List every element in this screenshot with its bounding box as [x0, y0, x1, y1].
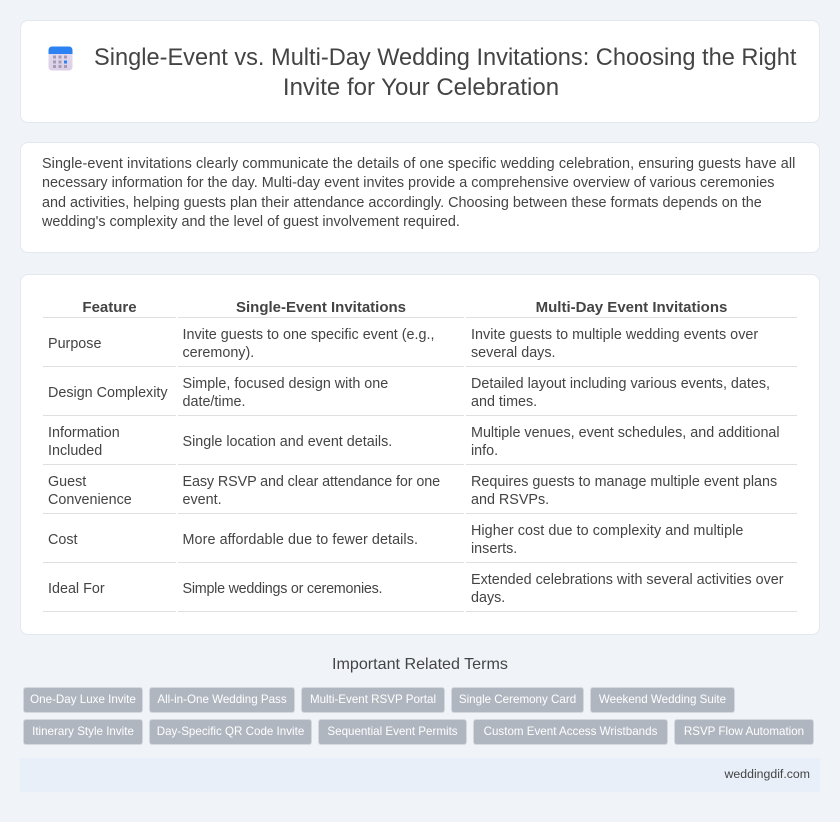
row: purpose: Invite guests to one specific event (e.g.,	[182, 327, 434, 343]
title: Invite for Your Celebration	[283, 74, 559, 101]
row: purpose: ceremony).	[182, 345, 254, 361]
row: design complexity: and times.	[471, 394, 537, 410]
tag: All-in-One Wedding Pass	[157, 693, 287, 706]
row: information included	[48, 425, 780, 459]
tag: Weekend Wedding Suite	[599, 693, 726, 706]
row: cost: More affordable due to fewer details.	[182, 532, 418, 548]
row: guest convenience: event.	[182, 492, 222, 508]
intro paragraph: necessary information for the day. Multi-day event invites provide a comprehensive overview of various ceremonies	[42, 175, 774, 191]
row: ideal for: Ideal For	[48, 581, 105, 597]
panel: comparison table card	[20, 274, 820, 635]
row: purpose	[48, 327, 758, 361]
column heading: multi-day: Multi-Day Event Invitations	[536, 299, 727, 316]
row: design complexity: Detailed layout including various events, dates,	[471, 376, 770, 392]
row: guest convenience: and RSVPs.	[471, 492, 549, 508]
row: cost: Cost	[48, 532, 78, 548]
panel: header card	[20, 20, 820, 123]
tag	[23, 687, 143, 713]
row: cost: inserts.	[471, 541, 517, 557]
tag: Itinerary Style Invite	[32, 725, 134, 738]
icon: calendar	[48, 46, 72, 70]
row: design complexity	[48, 376, 770, 410]
row: purpose: several days.	[471, 345, 556, 361]
tag list: related terms	[23, 687, 814, 745]
tag: RSVP Flow Automation	[684, 725, 804, 738]
row: design complexity: date/time.	[182, 394, 246, 410]
row: guest convenience: Easy RSVP and clear attendance for one	[182, 474, 440, 490]
intro paragraph: wedding's complexity and the level of guest involvement required.	[42, 214, 460, 230]
panel: intro text card	[20, 142, 820, 253]
column heading: feature: Feature	[82, 299, 137, 316]
row: guest convenience: Guest	[48, 474, 86, 490]
row: design complexity: Design Complexity	[48, 385, 168, 401]
tag	[149, 719, 312, 745]
tag: Sequential Event Permits	[327, 725, 458, 738]
tag: Custom Event Access Wristbands	[484, 725, 657, 738]
tag	[301, 687, 445, 713]
tag	[318, 719, 467, 745]
tag	[149, 687, 295, 713]
tag	[590, 687, 735, 713]
row: design complexity: Simple, focused design with one	[182, 376, 388, 392]
tag	[674, 719, 814, 745]
row: cost	[48, 523, 743, 557]
column heading: single-event: Single-Event Invitations	[236, 299, 406, 316]
row: information included: info.	[471, 443, 498, 459]
row: ideal for	[48, 572, 784, 606]
tag: Multi-Event RSVP Portal	[310, 693, 436, 706]
heading: important related terms: Important Related Terms	[332, 655, 508, 673]
row: information included: Single location and event details.	[182, 434, 392, 450]
row: information included: Multiple venues, event schedules, and additional	[471, 425, 780, 441]
row: ideal for: Simple weddings or ceremonies.	[182, 581, 382, 597]
intro paragraph	[42, 156, 795, 230]
row: information included: Information	[48, 425, 120, 441]
intro paragraph: Single-event invitations clearly communicate the details of one specific wedding celebration, ensuring guests have all	[42, 156, 795, 172]
row: ideal for: Extended celebrations with several activities over	[471, 572, 784, 588]
row: guest convenience: Convenience	[48, 492, 132, 508]
row: purpose: Invite guests to multiple wedding events over	[471, 327, 758, 343]
tag: One-Day Luxe Invite	[30, 693, 136, 706]
tag: Day-Specific QR Code Invite	[157, 725, 304, 738]
footer band	[20, 758, 820, 792]
row: information included: Included	[48, 443, 102, 459]
row: guest convenience	[48, 474, 777, 508]
tag	[451, 687, 584, 713]
row: ideal for: days.	[471, 590, 505, 606]
row: guest convenience: Requires guests to manage multiple event plans	[471, 474, 777, 490]
tag	[23, 719, 143, 745]
tag	[473, 719, 668, 745]
row: cost: Higher cost due to complexity and multiple	[471, 523, 743, 539]
title	[94, 45, 796, 101]
footer source text: weddingdif.com	[725, 767, 810, 781]
tag: Single Ceremony Card	[459, 693, 576, 706]
intro paragraph: and activities, helping guests plan their attendance accordingly. Choosing between these formats depends on the	[42, 195, 762, 211]
title: Single-Event vs. Multi-Day Wedding Invitations: Choosing the Right	[94, 45, 796, 71]
table: comparison	[43, 299, 797, 612]
row: purpose: Purpose	[48, 336, 101, 352]
